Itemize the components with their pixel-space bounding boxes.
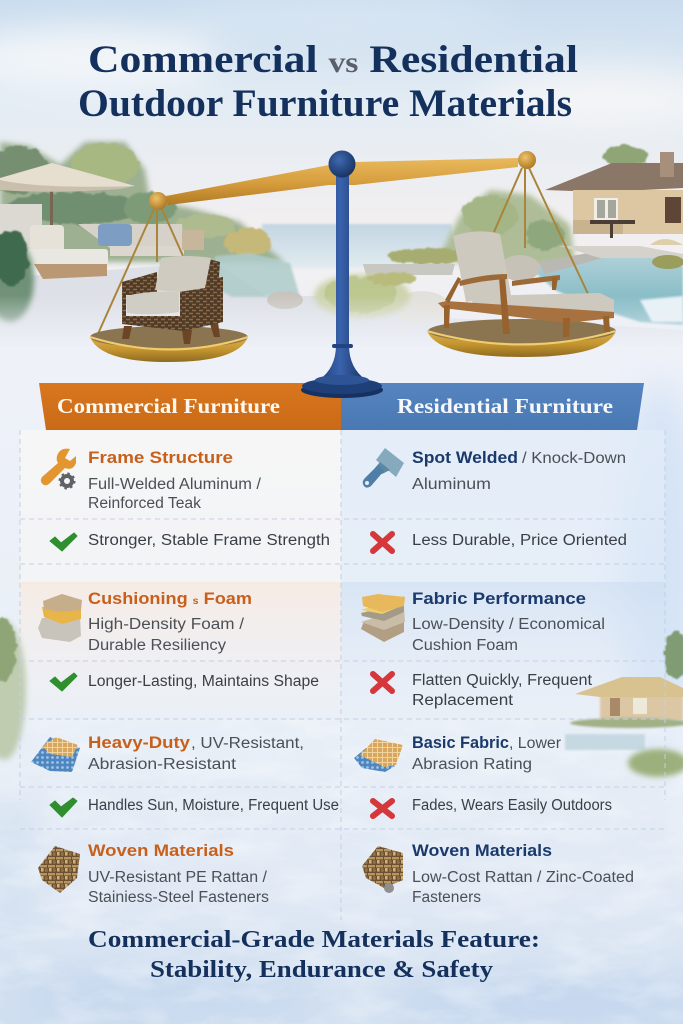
row: woven materials, residential: Woven Materials	[412, 841, 552, 860]
row: heavy-duty, commercial: Heavy-Duty	[88, 733, 191, 752]
house	[545, 152, 683, 269]
right pool	[530, 250, 683, 325]
row: fabric performance, residential: Fabric Performance	[412, 589, 586, 608]
foreground leaves	[0, 230, 34, 322]
icon: foam stack	[361, 594, 405, 642]
icon: fabric swatch	[354, 739, 403, 772]
icon: welding tool	[363, 448, 404, 488]
row: fabric performance, residential: Cushion Foam	[412, 637, 518, 654]
patio ground	[0, 262, 683, 345]
scale beam	[166, 158, 518, 205]
row: woven materials, residential	[362, 841, 634, 906]
sea horizon	[262, 224, 452, 268]
row: frame structure, commercial: Frame Structure	[88, 448, 233, 467]
row: woven materials, residential: Low-Cost Rattan / Zinc-Coated	[412, 869, 634, 886]
verdict: stronger frame: Stronger, Stable Frame Strength	[88, 532, 330, 549]
commercial header: Commercial Furniture	[57, 394, 280, 418]
row: woven materials, commercial	[38, 841, 269, 906]
row: woven materials, commercial: UV-Resistant PE Rattan /	[88, 869, 268, 886]
verdict: longer lasting: Longer-Lasting, Maintains Shape	[88, 673, 319, 690]
ropes left	[97, 209, 183, 336]
row: cushioning foam, commercial: Durable Resiliency	[88, 637, 226, 654]
row: basic fabric, residential: Basic Fabric	[412, 733, 509, 752]
footer statement: Commercial-Grade Materials Feature:	[88, 927, 540, 953]
commercial header	[39, 383, 341, 430]
scene fade	[0, 295, 683, 350]
table panels	[20, 430, 665, 722]
verdict: less durable: Less Durable, Price Oriented	[412, 532, 627, 549]
residential header: Residential Furniture	[397, 394, 613, 418]
teak lounger	[438, 231, 614, 337]
row: cushioning foam, commercial	[38, 589, 252, 654]
icon: cross	[373, 801, 392, 816]
row: frame structure, commercial: Reinforced Teak	[88, 495, 201, 512]
pivot knob	[328, 150, 356, 178]
row: woven materials, residential: Fasteners	[412, 889, 481, 906]
row: frame structure, commercial: Full-Welded Aluminum /	[88, 476, 262, 493]
row: woven materials, commercial: Woven Materials	[88, 841, 234, 860]
background landscape scene	[0, 142, 683, 350]
rocks and shrubs	[394, 291, 450, 325]
row: heavy-duty, commercial: , UV-Resistant,	[191, 735, 304, 752]
row: heavy-duty, commercial	[31, 733, 304, 773]
verdict: flatten quickly: Flatten Quickly, Frequent	[412, 672, 593, 689]
icon: check	[50, 673, 77, 691]
row: cushioning foam, commercial: Cushioning s Foam	[88, 589, 252, 608]
left pool	[215, 253, 300, 297]
row: basic fabric, residential: Abrasion Rating	[412, 756, 532, 773]
verdict: flatten quickly: Replacement	[412, 692, 514, 709]
side scenery left	[0, 618, 26, 760]
row: basic fabric, residential: , Lower	[509, 735, 561, 752]
header banner	[39, 383, 644, 430]
row: heavy-duty, commercial: Abrasion-Resistant	[88, 756, 237, 773]
icon: rattan weave with fastener	[362, 846, 403, 893]
right pivot	[518, 151, 536, 169]
stone walls	[363, 264, 455, 275]
verdict: flatten quickly	[373, 672, 593, 709]
left pan	[90, 326, 248, 362]
row: fabric performance, residential	[361, 589, 605, 654]
icon: check	[50, 533, 77, 551]
title	[78, 38, 578, 125]
icon: fabric swatch	[31, 737, 80, 772]
verdict: handles sun: Handles Sun, Moisture, Frequent Use	[88, 797, 339, 814]
wicker armchair	[122, 256, 223, 344]
outdoor sofa	[0, 204, 204, 279]
residential header	[341, 383, 644, 430]
side scenery right	[565, 631, 683, 777]
icon: cross	[373, 674, 392, 691]
row: woven materials, commercial: Stainiess-Steel Fasteners	[88, 889, 269, 906]
icon: wrench and gear	[41, 449, 76, 488]
left trees	[0, 142, 285, 262]
row: frame structure, commercial	[41, 448, 262, 512]
row: basic fabric, residential	[354, 733, 561, 773]
row: frame structure, residential: Spot Welded	[412, 448, 518, 467]
row: frame structure, residential: / Knock-Down	[522, 450, 626, 467]
ropes right	[494, 168, 589, 296]
balance scale	[90, 150, 616, 398]
comparison table	[0, 430, 683, 920]
row: fabric performance, residential: Low-Density / Economical	[412, 616, 605, 633]
verdict: fades: Fades, Wears Easily Outdoors	[412, 797, 612, 814]
footer statement: Stability, Endurance & Safety	[150, 957, 493, 983]
icon: check	[50, 798, 77, 817]
icon: foam stack	[38, 594, 82, 642]
icon: rattan weave	[38, 846, 80, 893]
table dashed lines	[20, 430, 665, 920]
row: cushioning foam, commercial: High-Density Foam /	[88, 616, 245, 633]
right trees	[388, 145, 647, 272]
left pivot	[149, 192, 167, 210]
row: frame structure, residential	[363, 448, 626, 493]
right pan	[427, 319, 616, 357]
title: Commercial vs Residential	[88, 38, 578, 81]
title: Outdoor Furniture Materials	[78, 82, 572, 125]
scale base and pole	[301, 172, 383, 398]
row: frame structure, residential: Aluminum	[412, 476, 491, 493]
umbrella	[0, 163, 135, 225]
icon: cross	[373, 534, 392, 551]
footer statement	[88, 927, 540, 983]
